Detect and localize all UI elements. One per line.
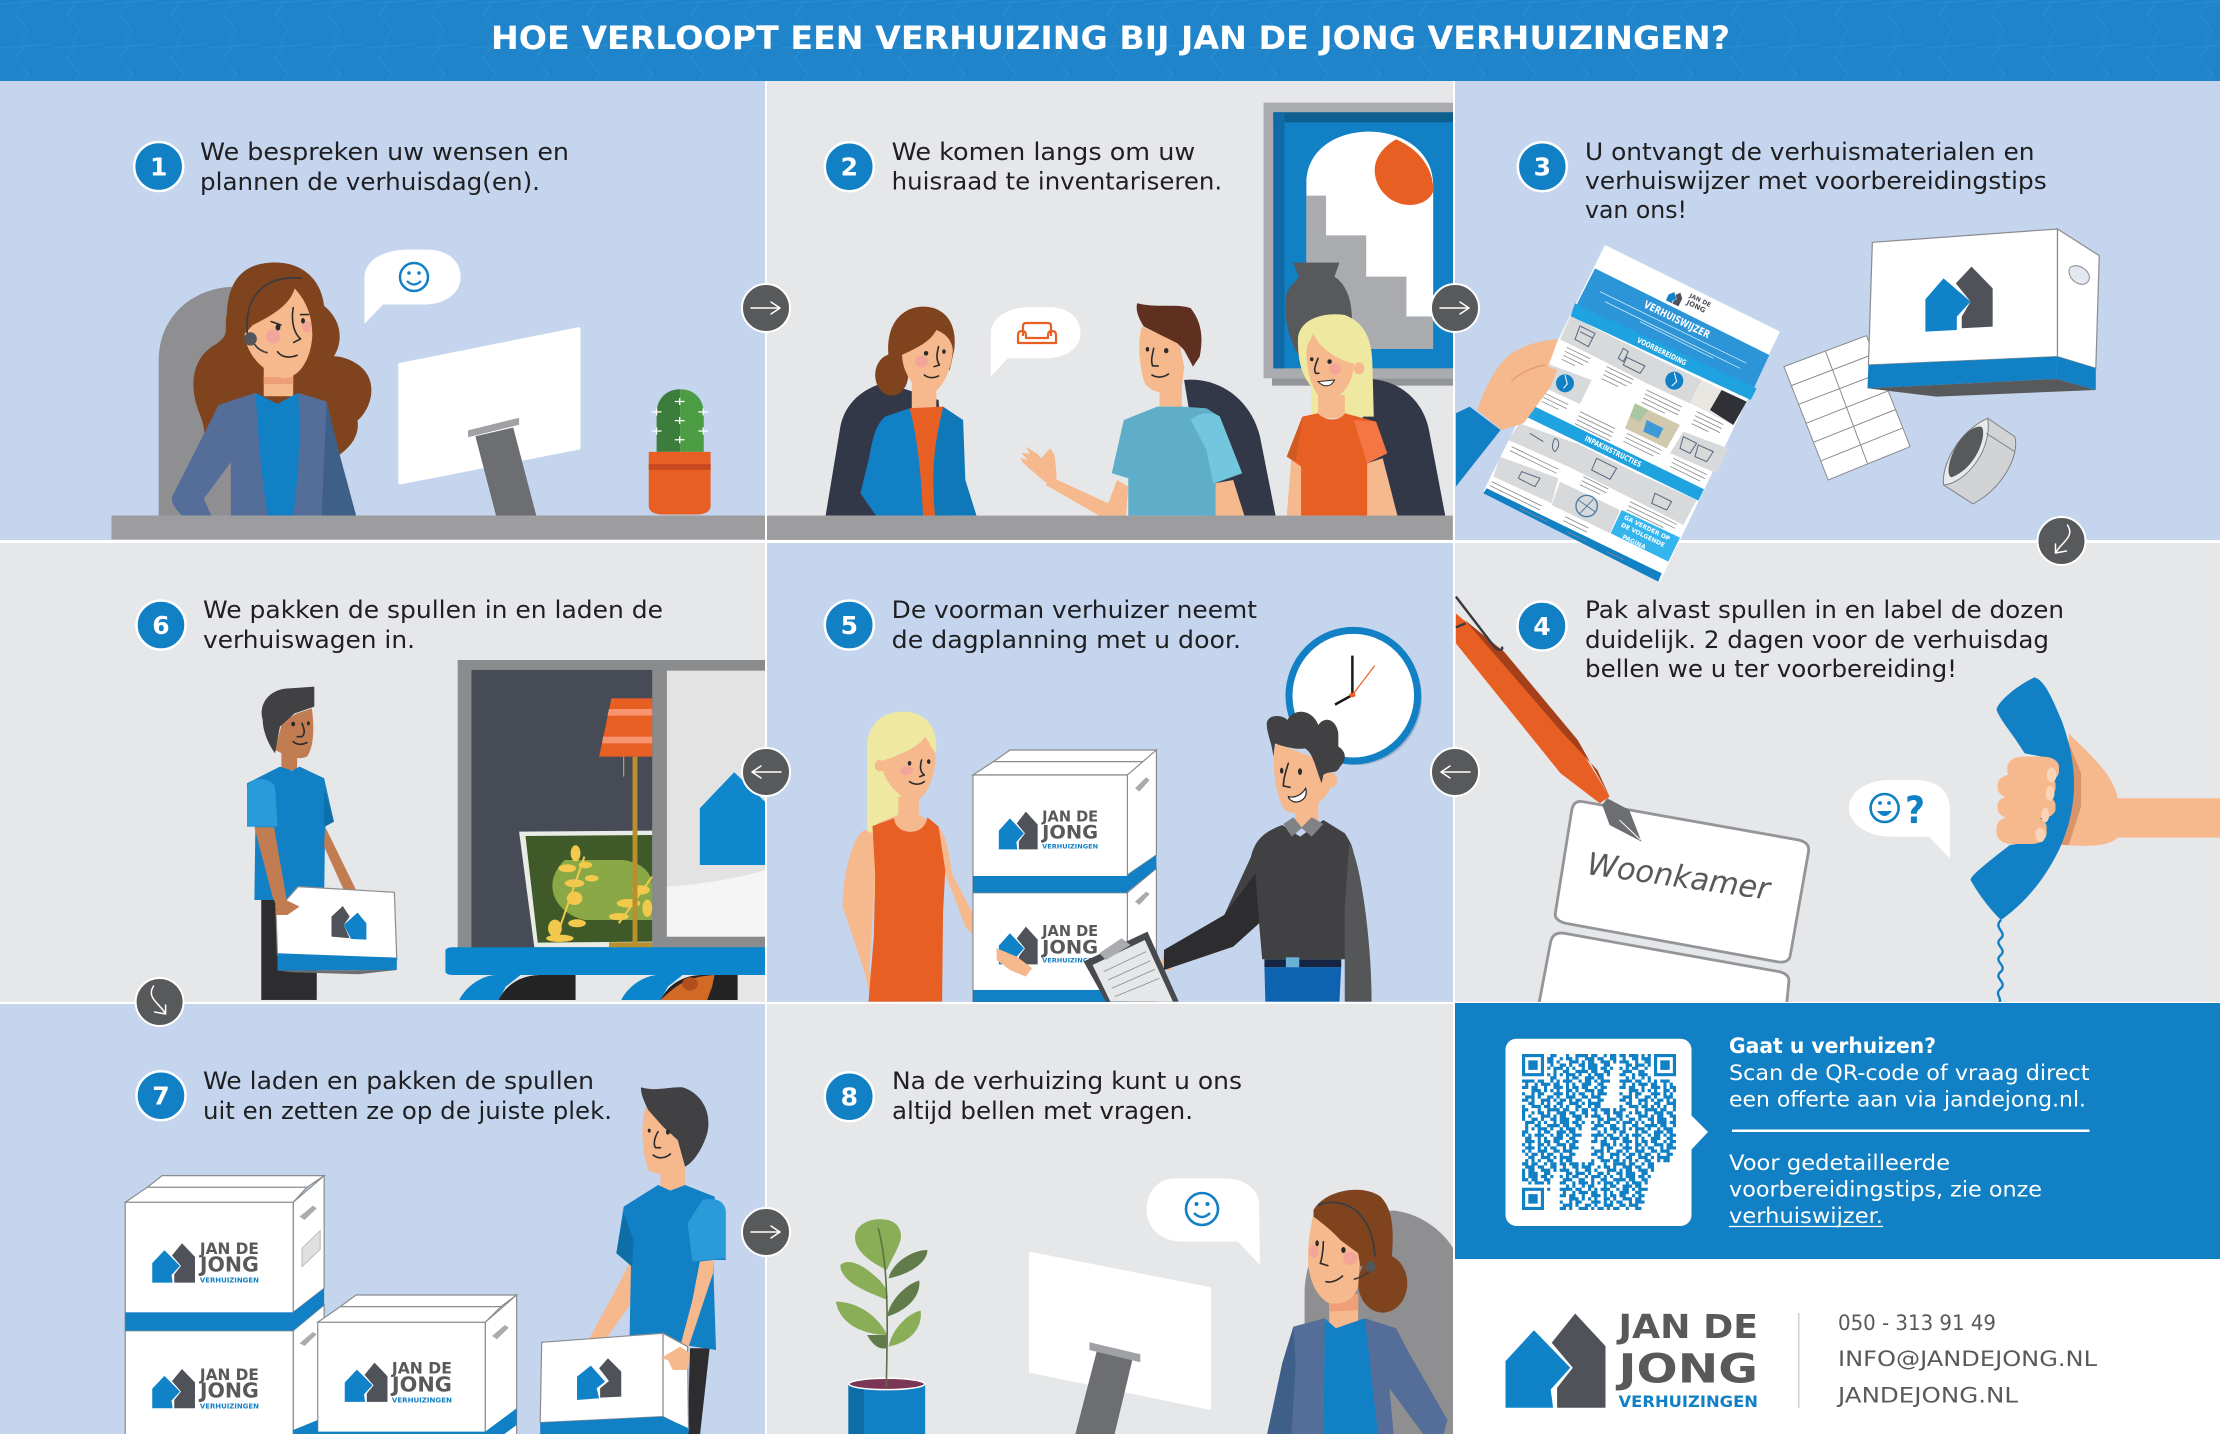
icon: smiley with question mark: ? [1905,789,1925,832]
panel: step 1 [0,81,770,540]
panel: company footer [1506,1307,2097,1411]
QR card [1506,1038,1708,1226]
arrow: step 1 to 2 [742,284,790,332]
contact details: JANDEJONG.NL [1836,1384,2018,1409]
step 7 heading [136,1067,612,1125]
call to action text: Scan de QR-code of vraag direct [1729,1061,2090,1086]
guide sheet text: GA VERDER OP [1623,514,1671,543]
step 2 heading [825,138,1222,196]
step 4 heading: 4 [1533,612,1551,641]
illustration: receptionist at desk [111,250,770,539]
guide sheet text: DE VOLGENDE [1620,522,1666,549]
illustration: unpacking boxes: JONG [198,1253,259,1277]
guide sheet text: VERHUISWIJZER [1642,299,1712,341]
step 3 heading: verhuiswijzer met voorbereidingstips [1585,167,2047,195]
company logo [1506,1307,1758,1411]
arrow: step 4 to 5 [1431,748,1479,796]
panel: step 2 [765,81,1456,540]
illustration: foreman with client: JONG [1040,936,1098,958]
step 3 heading [1518,138,2047,224]
contact details: INFO@JANDEJONG.NL [1838,1347,2097,1372]
illustration: unpacking boxes: JONG [390,1373,452,1397]
step 4 heading: Pak alvast spullen in en label de dozen [1585,596,2064,624]
icon: smiley [1186,1193,1218,1225]
illustration: foreman with client [843,630,1422,1002]
company logo: JAN DE [1616,1307,1758,1346]
panel: QR call to action [1455,1003,2220,1269]
guide sheet text: PAGINA [1621,534,1647,551]
step 2 heading: 2 [841,153,858,182]
illustration: unpacking boxes: VERHUIZINGEN [392,1396,452,1404]
illustration: hand, labels, box and tape [1477,229,2099,504]
step 7 heading: 7 [152,1082,170,1111]
guide sheet text: JONG [1684,298,1707,315]
illustration: unpacking boxes: JAN DE [199,1365,259,1384]
arrow: step 2 to 3 [1431,284,1479,332]
contact details: 050 - 313 91 49 [1838,1311,1996,1336]
panel: step 3 [1455,81,2220,582]
illustration: unpacking boxes [125,1087,726,1434]
title: HOE VERLOOPT EEN VERHUIZING BIJ JAN DE JONG VERHUIZINGEN? [491,19,1730,57]
step 8 heading: 8 [841,1083,858,1112]
step 5 heading: De voorman verhuizer neemt [892,596,1257,624]
illustration: after-care call [836,1178,1456,1434]
illustration: label pen and phone [1456,597,2220,1007]
header bar [0,0,2220,81]
call to action text: verhuiswijzer. [1729,1204,1883,1229]
step 8 heading: altijd bellen met vragen. [892,1097,1193,1125]
guide sheet text: VOORBEREIDING [1636,336,1688,367]
arrow: step 3 to 4 [2038,517,2086,565]
guide sheet text [1583,292,1712,551]
call to action text [1729,1034,2090,1229]
step 1 heading: We bespreken uw wensen en [200,138,569,166]
panel: step 6 [0,543,774,1002]
panel: step 8 [767,1004,1456,1434]
guide sheet text: JAN DE [1687,292,1712,309]
illustration: foreman with client: VERHUIZINGEN [1042,957,1098,965]
company logo: JONG [1615,1347,1758,1393]
icon: smiley [400,263,428,291]
illustration: unpacking boxes: JAN DE [391,1358,452,1377]
step 2 heading: huisraad te inventariseren. [892,168,1222,196]
step 5 heading: 5 [841,611,858,640]
illustration: foreman with client: JAN DE [1041,922,1098,940]
step 6 heading: verhuiswagen in. [203,626,415,654]
step 3 heading: 3 [1534,153,1551,182]
step 4 heading: bellen we u ter voorbereiding! [1585,655,1957,683]
illustration: loading the truck [247,660,774,1000]
illustration: foreman with client: JONG [1040,821,1098,843]
step 8 heading [825,1067,1242,1125]
illustration: sleeve [1456,407,1501,487]
step 6 heading: We pakken de spullen in en laden de [203,596,663,624]
illustration: foreman with client: VERHUIZINGEN [1042,842,1098,850]
step 4 heading [1518,596,2064,683]
call to action text: voorbereidingstips, zie onze [1729,1178,2042,1203]
illustration: foreman with client: JAN DE [1041,808,1098,826]
illustration: moving guide sheet [1483,245,1780,582]
panel: step 4 [1455,543,2220,1007]
icon: sofa [1018,323,1056,343]
step 1 heading: plannen de verhuisdag(en). [200,168,540,196]
step 6 heading [136,596,663,654]
step 8 heading: Na de verhuizing kunt u ons [892,1067,1242,1095]
company logo: VERHUIZINGEN [1618,1392,1758,1411]
icon: smiley with question mark [1871,789,1925,832]
illustration: inventory visit [765,103,1456,540]
step 1 heading: 1 [150,152,167,182]
panel: step 7 [0,1004,765,1434]
step 3 heading: U ontvangt de verhuismaterialen en [1585,138,2034,166]
step 7 heading: We laden en pakken de spullen [203,1067,594,1095]
panel: step 5 [767,543,1453,1002]
step 3 heading: van ons! [1585,196,1687,224]
QR code [1522,1054,1676,1210]
illustration: unpacking boxes: VERHUIZINGEN [200,1402,259,1410]
illustration: unpacking boxes: JONG [198,1379,259,1403]
arrow: step 7 to 8 [742,1208,790,1256]
illustration: unpacking boxes: JAN DE [199,1239,259,1258]
call to action text: Voor gedetailleerde [1729,1151,1950,1176]
step 2 heading: We komen langs om uw [892,138,1195,166]
illustration: unpacking boxes: VERHUIZINGEN [200,1277,259,1285]
guide sheet text: INPAKINSTRUCTIES [1583,434,1643,469]
call to action text: Gaat u verhuizen? [1729,1034,1936,1059]
step 5 heading [825,596,1257,654]
step 5 heading: de dagplanning met u door. [892,626,1241,654]
step 1 heading [134,138,569,196]
handwritten label text: Woonkamer [1585,846,1774,908]
step 7 heading: uit en zetten ze op de juiste plek. [203,1097,612,1125]
arrow: step 5 to 6 [742,748,790,796]
call to action text: een offerte aan via jandejong.nl. [1729,1088,2086,1113]
step 4 heading: duidelijk. 2 dagen voor de verhuisdag [1585,626,2049,654]
arrow: step 6 to 7 [136,978,184,1026]
contact details [1836,1311,2097,1409]
step 6 heading: 6 [152,611,170,640]
